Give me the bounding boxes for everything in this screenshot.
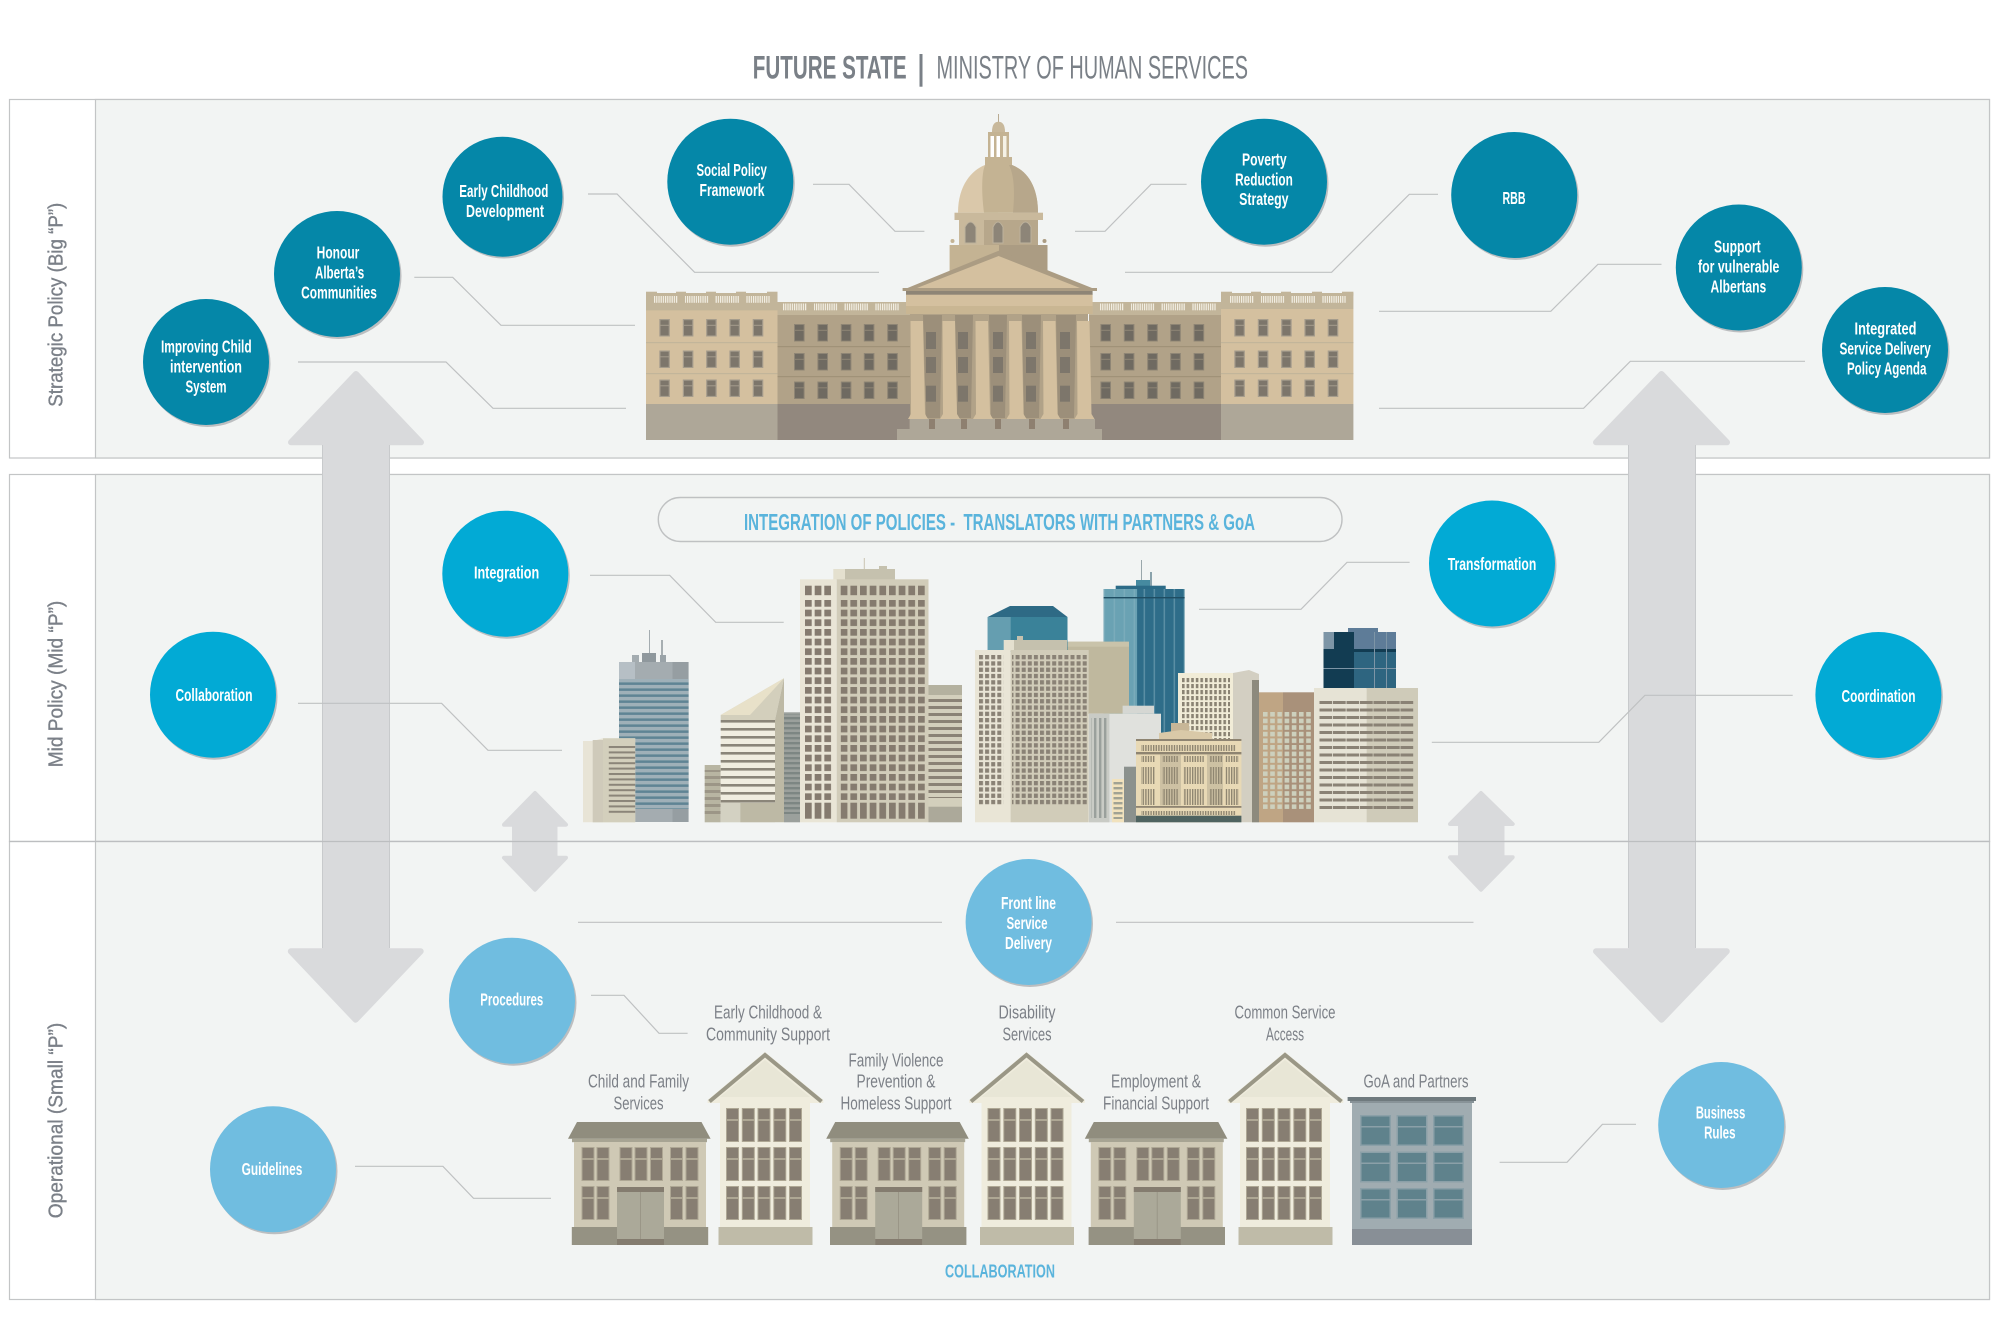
circle: integration (442, 511, 570, 639)
building: employment and financial support (1085, 1122, 1227, 1245)
small pale block (1112, 767, 1136, 822)
text: family violence prevention: Family Violence (848, 1050, 944, 1070)
circle: poverty reduction strategy (1201, 119, 1328, 247)
building: common service access (1228, 1052, 1343, 1245)
text: disability services: Disability (998, 1002, 1056, 1022)
text: collaboration caption: COLLABORATION (945, 1261, 1055, 1282)
circle: improving child intervention system: System (186, 377, 226, 397)
illustration: service buildings row (568, 1052, 1476, 1245)
circle: support for vulnerable albertans: Support (1714, 237, 1761, 257)
circle: integrated service delivery policy agenda: Integrated (1854, 319, 1916, 339)
text: disability services: Services (1002, 1024, 1052, 1045)
circle: integrated service delivery policy agenda: Policy Agenda (1847, 359, 1927, 379)
circle: integrated service delivery policy agenda (1822, 287, 1950, 415)
circle: poverty reduction strategy: Strategy (1239, 189, 1289, 209)
text: common service access (1234, 1002, 1336, 1045)
circle: procedures: Procedures (480, 990, 543, 1010)
circle: social policy framework: Social Policy (697, 160, 767, 180)
circle: guidelines (210, 1106, 338, 1234)
circle: honour albertas communities (274, 211, 402, 339)
text: early childhood and community support: Community Support (706, 1024, 830, 1045)
circle: social policy framework (667, 119, 795, 247)
circle: support for vulnerable albertans: for vulnerable (1698, 257, 1780, 277)
tower: blue grey antenna (619, 630, 689, 822)
text: GoA and partners: GoA and Partners (1364, 1070, 1468, 1092)
circle: integration: Integration (474, 562, 539, 582)
building: early childhood (708, 1052, 823, 1245)
circle: support for vulnerable albertans: Albertans (1711, 277, 1766, 297)
tower: large office centre (975, 636, 1089, 822)
building: child and family services (568, 1122, 711, 1245)
text: disability services (998, 1002, 1056, 1045)
right wing (1221, 292, 1353, 440)
circle: RBB: RBB (1502, 188, 1526, 208)
circle: improving child intervention system: intervention (170, 357, 242, 377)
building: GoA and partners (1348, 1097, 1476, 1245)
text: family violence prevention: Homeless Support (840, 1092, 952, 1114)
tower: pale grey (1089, 706, 1161, 822)
circle: early childhood development: Development (466, 201, 544, 221)
circle: business rules: Business (1696, 1103, 1745, 1123)
portico with columns (897, 251, 1102, 440)
label: operational: Operational (Small “P”) (44, 1023, 68, 1218)
left mid wing (778, 302, 912, 440)
text: common service access: Access (1266, 1024, 1304, 1045)
pill: integration banner: INTEGRATION OF POLICIES - TRANSLATORS WITH PARTNERS & GoA (744, 509, 1255, 535)
circle: improving child intervention system (143, 299, 270, 427)
circle: coordination: Coordination (1842, 686, 1916, 706)
panel: mid policy band (10, 474, 1990, 842)
text: common service access: Common Service (1234, 1002, 1336, 1022)
tower: wedge top (705, 678, 800, 822)
text: child and family services (588, 1070, 690, 1114)
circle: transformation (1429, 500, 1556, 628)
tower: blue hexagonal (988, 606, 1068, 652)
tower: tan (1068, 642, 1129, 714)
circle: honour albertas communities: Communities (301, 282, 377, 302)
text: employment and financial support: Financial Support (1103, 1092, 1209, 1114)
label: strategic policy: Strategic Policy (Big “P”) (44, 203, 68, 407)
circle: honour albertas communities: Honour (317, 242, 359, 262)
text: employment and financial support: Employment & (1111, 1070, 1201, 1092)
heritage building (1136, 723, 1241, 822)
text: early childhood and community support (706, 1002, 830, 1045)
tower: dark glass (1324, 628, 1396, 688)
circle: integrated service delivery policy agenda: Service Delivery (1840, 339, 1931, 359)
title: FUTURE STATE (753, 50, 907, 86)
illustration: legislature building (646, 114, 1353, 440)
circle: procedures (449, 938, 576, 1066)
circle: business rules (1658, 1062, 1786, 1190)
circle: early childhood development: Early Childhood (459, 181, 548, 201)
text: family violence prevention (840, 1050, 952, 1114)
circle: support for vulnerable albertans (1676, 204, 1803, 332)
tower: cream low (583, 738, 635, 822)
circle: RBB (1451, 132, 1579, 260)
text: employment and financial support (1103, 1070, 1209, 1114)
circle: business rules: Rules (1704, 1123, 1736, 1143)
left wing (646, 292, 778, 440)
tower: cream with side (1178, 670, 1259, 822)
circle: poverty reduction strategy: Reduction (1235, 169, 1293, 189)
right mid wing (1089, 302, 1221, 440)
building: disability services (969, 1052, 1085, 1245)
panel: operational band (10, 842, 1990, 1300)
circle: front line service delivery: Service (1006, 913, 1048, 933)
panel: strategic policy band (10, 100, 1990, 458)
circle: early childhood development (442, 137, 564, 258)
pill: integration banner (658, 498, 1342, 542)
arrow: left large double arrow (291, 374, 421, 1020)
circle: collaboration (150, 632, 278, 760)
circle: poverty reduction strategy: Poverty (1242, 150, 1287, 170)
circle: transformation: Transformation (1448, 554, 1536, 574)
dome and drum (950, 114, 1048, 275)
building: family violence prevention (826, 1122, 969, 1245)
circle: social policy framework: Framework (700, 180, 765, 200)
arrow: right large double arrow (1596, 374, 1727, 1020)
circle: front line service delivery: Delivery (1005, 933, 1052, 953)
circle: honour albertas communities: Alberta’s (315, 262, 364, 282)
circle: front line service delivery (966, 859, 1093, 987)
tower: striped annex (928, 685, 962, 822)
illustration: downtown skyline (583, 558, 1418, 822)
tower: brown brick (1259, 692, 1314, 822)
text: early childhood and community support: Early Childhood & (714, 1002, 822, 1022)
tower: teal glass (1104, 560, 1185, 751)
tower: main tall office (800, 558, 928, 822)
title (753, 50, 1248, 87)
title: MINISTRY OF HUMAN SERVICES (936, 50, 1248, 86)
circle: guidelines: Guidelines (242, 1159, 303, 1179)
text: child and family services: Child and Family (588, 1070, 690, 1092)
text: family violence prevention: Prevention & (856, 1070, 936, 1092)
connector lines (298, 184, 1805, 1198)
label: mid policy: Mid Policy (Mid “P”) (44, 601, 68, 767)
circle: improving child intervention system: Improving Child (161, 337, 252, 357)
tower: white striped (1314, 688, 1418, 822)
arrow: right small double arrow (1450, 793, 1513, 890)
circle: front line service delivery: Front line (1001, 893, 1056, 913)
arrow: left small double arrow (504, 793, 566, 890)
circle: coordination (1815, 632, 1943, 760)
text: child and family services: Services (614, 1092, 664, 1114)
circle: collaboration: Collaboration (176, 685, 252, 705)
